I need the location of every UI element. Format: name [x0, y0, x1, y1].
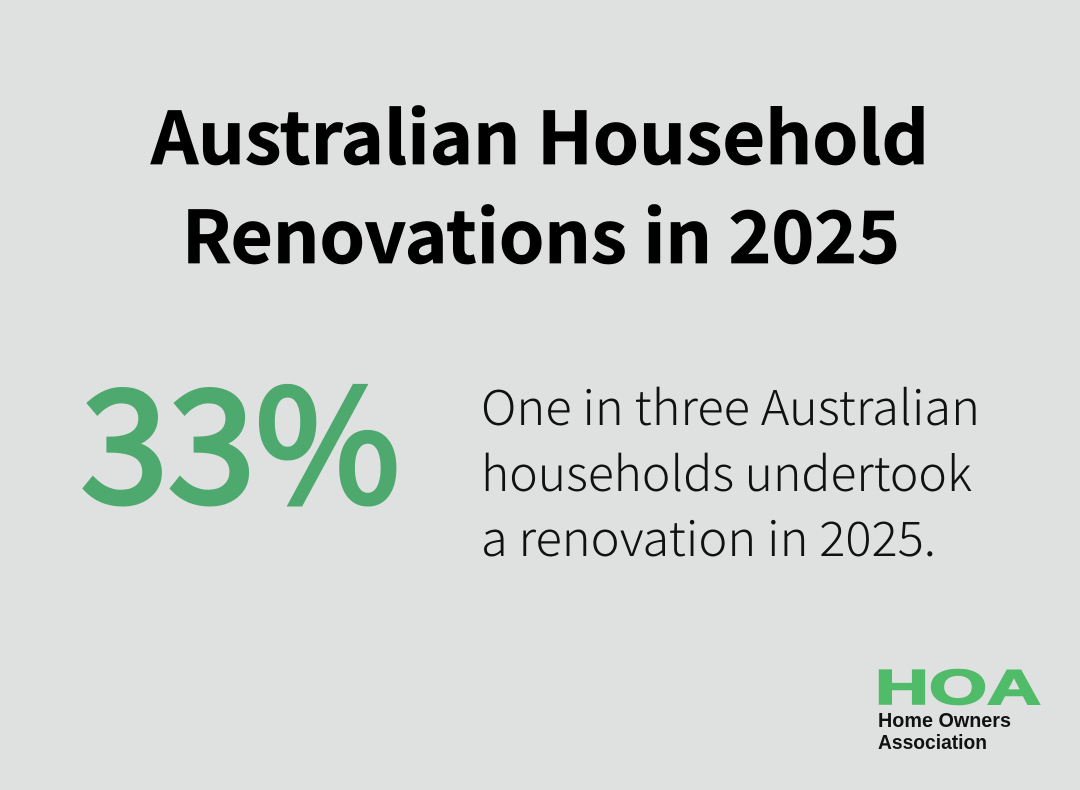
- logo wordmark: Association: [878, 732, 987, 754]
- description text: One in three Australian: [481, 369, 980, 439]
- description text: [481, 369, 980, 570]
- statistic: 33%: 33%: [81, 322, 400, 547]
- title: Renovations in 2025: [182, 179, 900, 284]
- description text: a renovation in 2025.: [481, 500, 936, 570]
- title: Australian Household: [150, 80, 929, 185]
- title: [150, 80, 929, 284]
- logo mark: HOA: HOA: [875, 661, 1041, 715]
- logo: Home Owners Association: [875, 661, 1041, 754]
- description text: households undertook: [481, 435, 972, 505]
- logo wordmark: [878, 710, 1011, 754]
- logo wordmark: Home Owners: [878, 710, 1011, 732]
